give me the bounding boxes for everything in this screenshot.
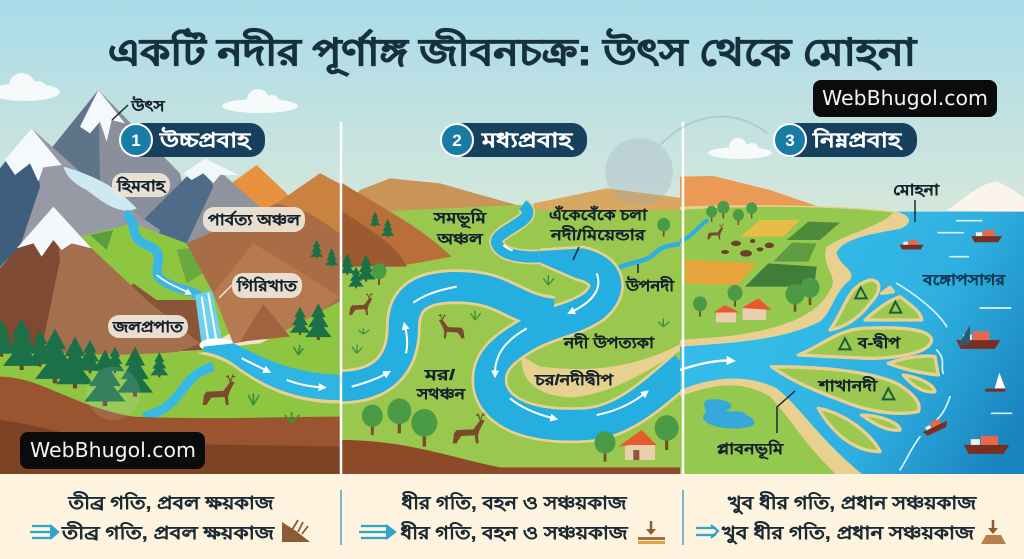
badge: WebBhugol bottom left: WebBhugol.com (30, 438, 196, 462)
watermark logo faint (87, 367, 140, 420)
glacier (63, 167, 137, 211)
label: deposition: মর/ (424, 367, 456, 384)
section header: middle course: মধ্যপ্রবাহ (481, 130, 574, 152)
section header: middle course (441, 123, 587, 157)
bottom info strip (0, 474, 1024, 559)
label: river valley: নদী উপত্যকা (563, 333, 655, 352)
section header: upper course: উচ্চপ্রবাহ (159, 127, 252, 152)
trees bottom (362, 399, 679, 462)
wildlife and grass (349, 275, 669, 443)
caption: lower course (696, 491, 1006, 544)
tributary (613, 243, 685, 270)
section header: upper course: 1 (131, 131, 141, 150)
label: plains region: সমভূমি (433, 208, 487, 229)
distant orange hill (227, 165, 300, 227)
label: deposition (416, 367, 466, 403)
grass tufts (248, 345, 303, 423)
caption: middle course (359, 491, 665, 544)
main river (143, 343, 345, 417)
back snow peak (50, 90, 193, 240)
label: waterfall: জলপ্রপাত (112, 319, 184, 336)
label: source: উৎস (130, 96, 166, 115)
watermark globe (605, 116, 767, 206)
delta triangle markers (839, 287, 901, 399)
label: waterfall (108, 315, 188, 338)
label: Bay of Bengal: বঙ্গোপসাগর (922, 272, 1006, 289)
coastal wave lines (897, 221, 1012, 470)
farm fields (685, 220, 840, 287)
front brown snow peak (0, 207, 200, 357)
badge: WebBhugol bottom left (20, 432, 205, 469)
title: একটি নদীর পূর্ণাঙ্গ জীবনচক্র: উৎস থেকে মোহনা (108, 28, 917, 77)
label: deposition: সথঞ্চন (416, 386, 466, 403)
section header: lower course (774, 123, 917, 157)
label: gorge (219, 273, 302, 298)
caption: middle course: ধীর গতি, বহন ও সঞ্চয়কাজ (400, 521, 629, 543)
panel: upper course scene (0, 90, 345, 475)
label: source (112, 96, 166, 120)
caption: lower course: খুব ধীর গতি, প্রধান সঞ্চয়কাজ (721, 521, 975, 544)
bottom soil (340, 440, 685, 475)
label: estuary: মোহনা (893, 182, 940, 199)
label: meander (549, 205, 648, 260)
trees and cattle (693, 201, 819, 317)
badge: WebBhugol top right: WebBhugol.com (822, 86, 988, 110)
caption: lower course: খুব ধীর গতি, প্রধান সঞ্চয়কাজ (727, 491, 977, 514)
label: glacier (112, 173, 170, 197)
farm houses (713, 298, 772, 322)
river arrows (352, 245, 645, 418)
section header: lower course: 3 (785, 131, 795, 150)
river island sand (522, 342, 685, 397)
valley green (0, 223, 267, 353)
section header: upper course (120, 123, 265, 157)
label: floodplain: প্লাবনভূমি (717, 439, 784, 460)
meandering river with sand banks (340, 205, 685, 425)
house (618, 430, 657, 460)
river arrow into delta (680, 361, 730, 370)
label: glacier: হিমবাহ (116, 176, 166, 195)
tributary entering (680, 220, 708, 242)
mountain stream (125, 213, 200, 297)
label: tributary (625, 264, 675, 295)
label: tributary: উপনদী (625, 276, 675, 295)
section header: lower course: নিম্নপ্রবাহ (812, 128, 903, 152)
label: mountain region: পার্বত্য অঞ্চল (208, 210, 301, 229)
panel: lower course scene (680, 176, 1024, 475)
delta islands (772, 280, 938, 452)
label: plains region (433, 208, 487, 248)
bottom dividers (341, 490, 683, 545)
label: meander: নদী/মিয়েন্ডার (550, 225, 646, 244)
label: distributary (777, 376, 878, 433)
trees far left (340, 212, 670, 288)
white distant hill (947, 182, 1024, 212)
brown foreground soil (0, 377, 345, 475)
waterfall (195, 290, 234, 352)
orange hill (680, 176, 817, 208)
floodplain lake (703, 399, 755, 429)
caption: upper course: তীব্র গতি, প্রবল ক্ষয়কাজ (61, 521, 275, 543)
section header: middle course: 2 (452, 131, 462, 150)
lower green ground (0, 298, 345, 423)
caption: upper course: তীব্র গতি, প্রবল ক্ষয়কাজ (67, 491, 275, 513)
pine forest (0, 240, 338, 406)
badge: WebBhugol top right (813, 80, 997, 117)
right blue mountain (143, 158, 260, 243)
caption: upper course (30, 491, 310, 543)
ground (340, 205, 685, 475)
label: estuary (893, 182, 940, 222)
label: mountain region (203, 207, 305, 232)
upper land (680, 205, 909, 347)
panel: middle course scene (340, 178, 685, 475)
dividers (341, 122, 683, 474)
lower floodplain (680, 378, 863, 475)
left mountain (0, 128, 160, 280)
label: plains region: অঞ্চল (436, 231, 483, 248)
sea and delta water (680, 212, 1024, 475)
stag (203, 374, 235, 405)
caption: middle course: ধীর গতি, বহন ও সঞ্চয়কাজ (402, 491, 628, 513)
right brown hills and gorge (110, 173, 345, 353)
label: meander: এঁকেবেঁকে চলা (549, 205, 648, 224)
clouds (0, 73, 772, 159)
distant hills (340, 178, 685, 267)
label: gorge: গিরিখাত (236, 276, 298, 295)
label: distributary: শাখানদী (818, 376, 878, 395)
label: river island: চর/নদীদ্বীপ (534, 370, 614, 389)
label: delta: ব-দ্বীপ (857, 333, 901, 352)
boats (900, 230, 1009, 454)
small rock by gorge (240, 304, 290, 342)
